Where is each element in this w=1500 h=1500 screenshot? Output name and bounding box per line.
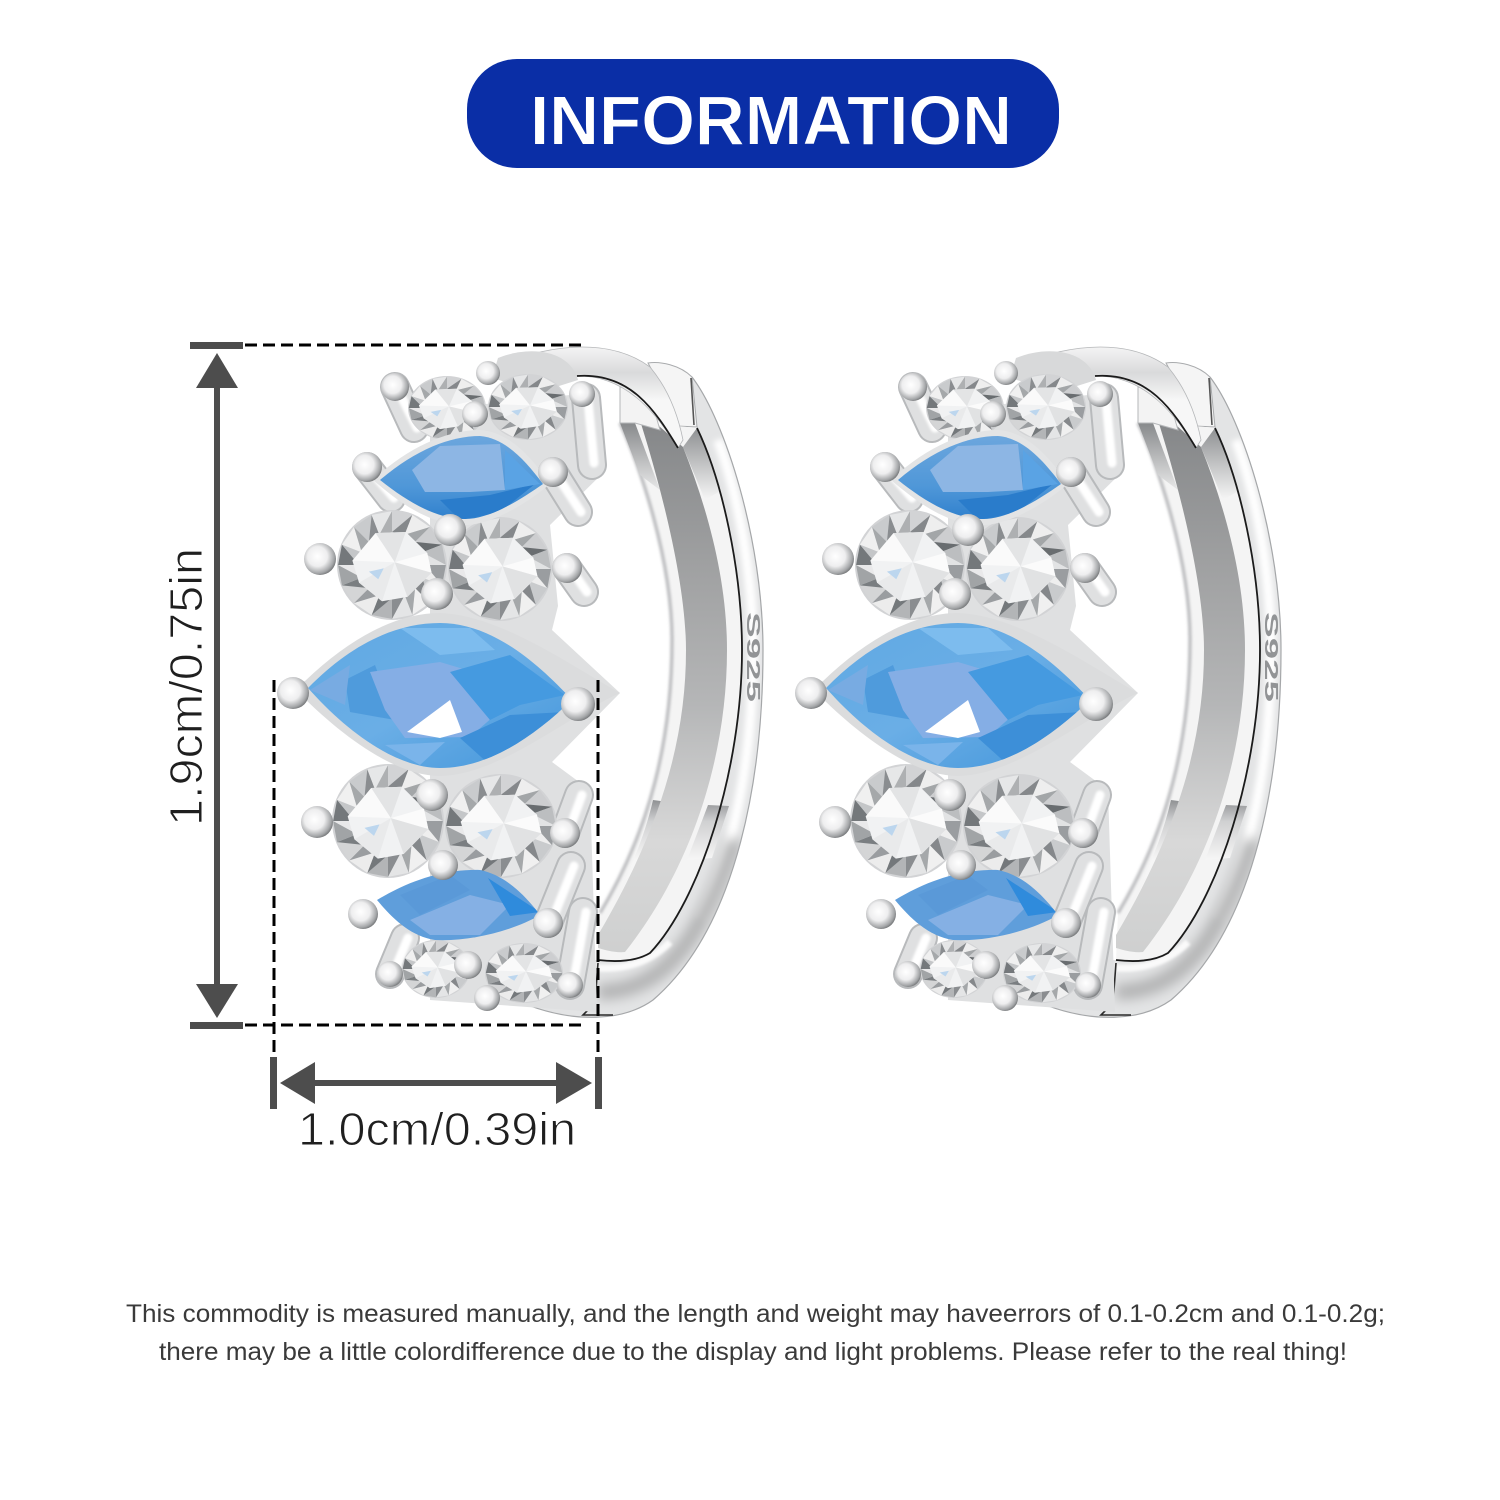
width label: 1.0cm/0.39in xyxy=(298,1103,576,1155)
title pill xyxy=(467,59,1059,168)
right earring photo xyxy=(795,347,1281,1017)
disclaimer text: there may be a little colordifference due to the display and light problems. Please refer to the real thing! xyxy=(159,1338,1347,1366)
left earring photo xyxy=(277,347,763,1017)
height dimension arrow xyxy=(190,342,243,1029)
dashed measurement guides xyxy=(245,345,598,1056)
width dimension arrow xyxy=(270,1057,602,1109)
disclaimer text xyxy=(126,1300,1385,1366)
right earring photo: S925 xyxy=(1261,612,1281,702)
left earring photo: S925 xyxy=(743,612,763,702)
height label: 1.9cm/0.75in xyxy=(160,548,212,826)
disclaimer text: This commodity is measured manually, and the length and weight may haveerrors of 0.1-0.2cm and 0.1-0.2g; xyxy=(126,1300,1385,1328)
title pill: INFORMATION xyxy=(530,82,1012,160)
